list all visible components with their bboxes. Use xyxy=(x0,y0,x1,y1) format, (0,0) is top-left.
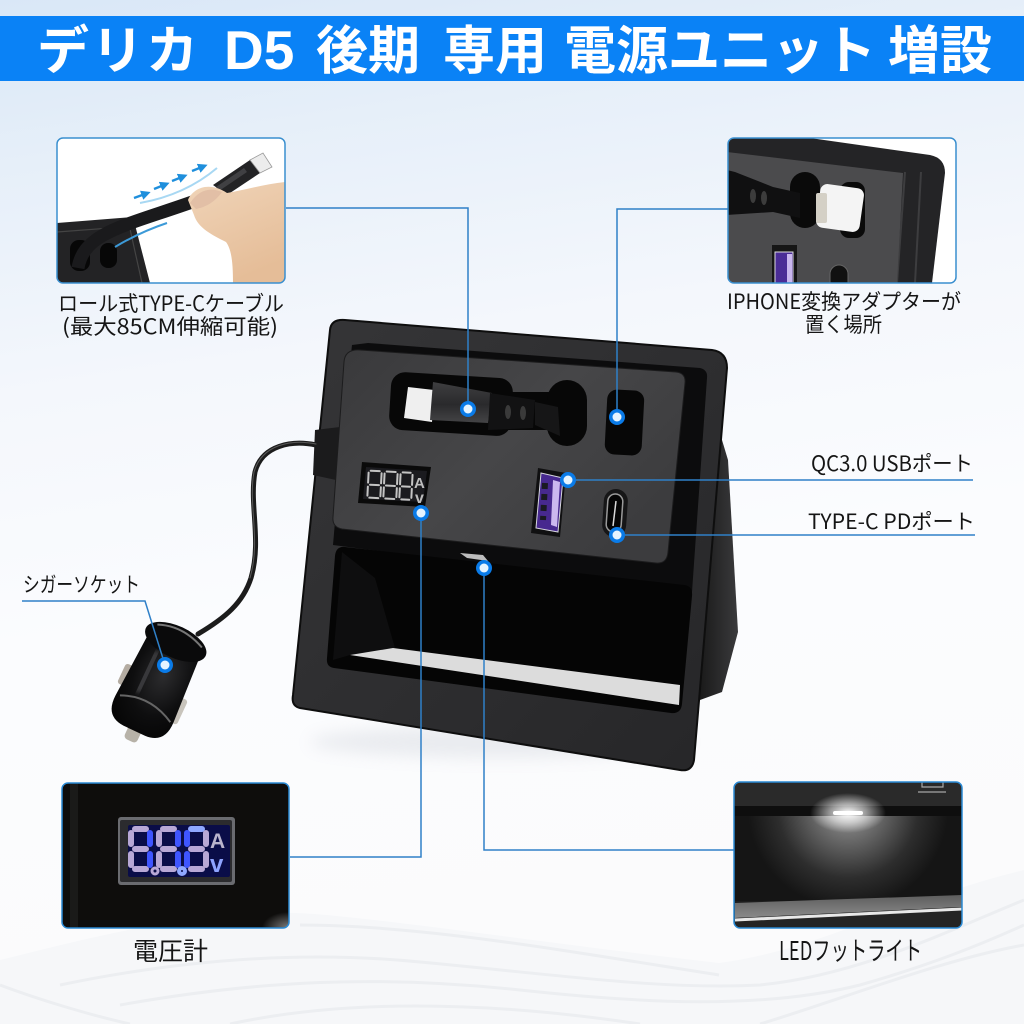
panel: voltmeter: v xyxy=(210,851,224,878)
panel: roll type Type-C cable xyxy=(57,138,286,284)
stretch arrows xyxy=(134,167,202,198)
title: 電源ユニット xyxy=(564,23,876,81)
lower tray xyxy=(327,547,692,713)
left clip xyxy=(117,663,134,687)
right clip xyxy=(169,697,188,725)
label: roll cable: ロール式TYPE-Cケーブル xyxy=(58,288,284,318)
highlights xyxy=(157,620,205,647)
callout dots xyxy=(157,401,625,673)
panel: voltmeter xyxy=(61,782,290,929)
title band xyxy=(0,16,1024,81)
LED light xyxy=(460,553,488,561)
inner plate xyxy=(727,152,903,283)
adapter hole xyxy=(604,389,645,456)
recess xyxy=(333,343,707,592)
cable xyxy=(728,170,790,216)
light cone xyxy=(750,816,946,900)
outer plate xyxy=(293,320,727,770)
title: デリカ xyxy=(37,23,201,81)
Type-C port xyxy=(830,264,848,282)
swoosh lines xyxy=(140,168,217,203)
panel: LED foot light xyxy=(734,782,962,928)
voltmeter xyxy=(358,462,431,507)
floor xyxy=(735,895,962,918)
shadow under device xyxy=(310,726,690,758)
white strip xyxy=(350,648,680,705)
unit letters: A xyxy=(210,830,225,853)
title: 専用 xyxy=(443,23,547,81)
digit 3 xyxy=(180,829,206,873)
title: 後期 xyxy=(316,23,420,81)
device: power unit xyxy=(293,320,738,770)
title: 増設 xyxy=(888,23,992,81)
label: voltmeter: 電圧計 xyxy=(133,932,208,968)
hand xyxy=(188,182,286,284)
frame strip xyxy=(897,172,921,283)
label: adapter: IPHONE変換アダプターが xyxy=(727,286,961,316)
QC3.0 USB port xyxy=(531,468,566,537)
back wall xyxy=(734,806,962,808)
voltmeter: A xyxy=(414,475,425,492)
body xyxy=(105,630,204,744)
title: D5 xyxy=(224,19,294,81)
top panel xyxy=(333,350,685,563)
label: Type-C PD port: TYPE-C PDポート xyxy=(808,506,975,536)
cable tab xyxy=(313,427,340,480)
cable slot xyxy=(388,371,587,446)
white adapter xyxy=(815,183,865,233)
callout lines xyxy=(22,208,975,857)
label: cigar socket: シガーソケット xyxy=(23,569,140,599)
retracted Type-C cable xyxy=(404,382,560,436)
label: roll cable xyxy=(58,288,284,341)
USB port xyxy=(772,245,797,282)
label: roll cable: (最大85CM伸縮可能) xyxy=(62,311,278,341)
label: adapter xyxy=(727,286,961,339)
tip xyxy=(123,721,144,744)
voltmeter: v xyxy=(415,490,424,507)
label: adapter: 置く場所 xyxy=(805,309,882,339)
device frame xyxy=(727,138,945,283)
small corner detail xyxy=(922,782,943,787)
digit 1 xyxy=(131,829,150,869)
LED glow xyxy=(810,793,886,833)
flat cable xyxy=(78,201,195,268)
holes xyxy=(790,172,820,228)
meter bezel xyxy=(118,817,235,885)
cigar cable xyxy=(198,442,316,634)
side wedge xyxy=(700,430,738,700)
Type-C PD port xyxy=(601,488,629,538)
device corner xyxy=(57,217,150,283)
panel: iPhone adapter storage xyxy=(727,138,956,295)
label: QC3.0 USB port: QC3.0 USBポート xyxy=(811,448,973,478)
cigar socket xyxy=(97,612,215,756)
label: LED foot light: LEDフットライト xyxy=(779,931,922,968)
digit 2 xyxy=(154,829,178,872)
connector xyxy=(213,160,260,195)
top band xyxy=(734,782,962,806)
flange xyxy=(139,613,212,670)
meter screen xyxy=(128,825,230,877)
